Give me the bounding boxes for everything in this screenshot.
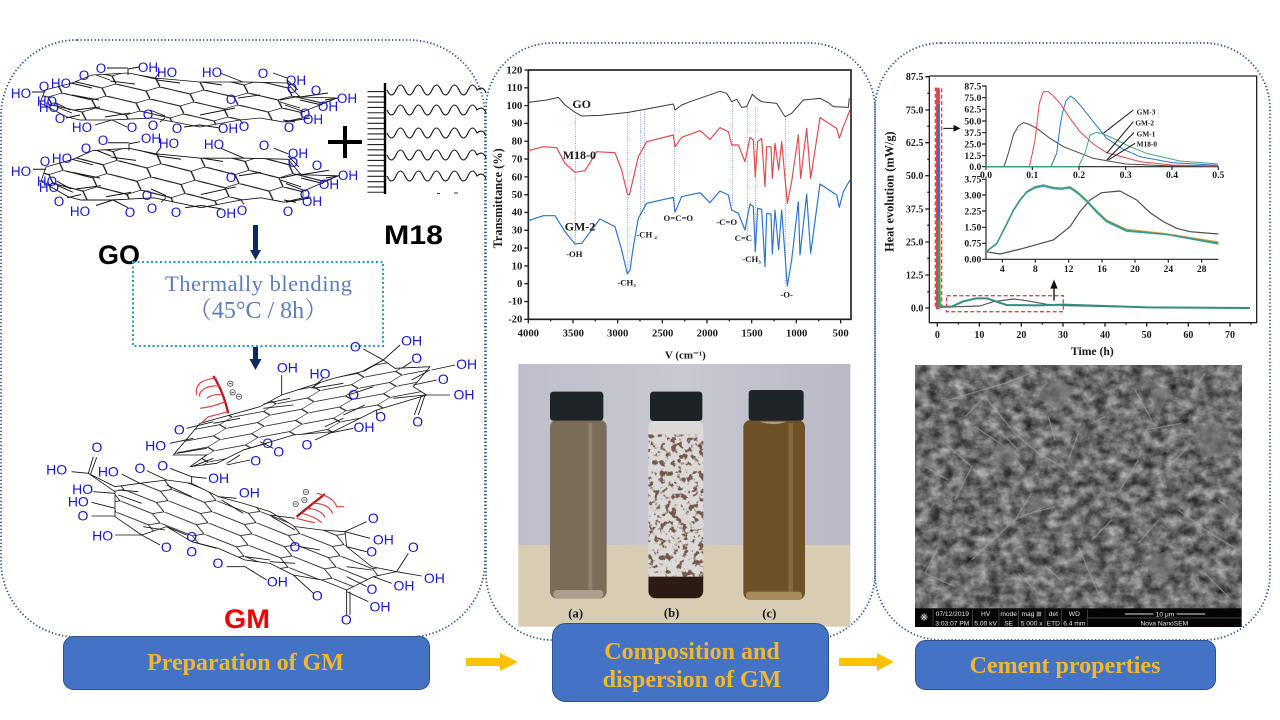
FTIR axis tick labels: 70 [512, 154, 522, 165]
GM molecule lower sheet: HO [92, 527, 113, 543]
GO curve [528, 91, 849, 117]
vial a [550, 392, 607, 598]
top inset tick labels: 0.5 [1212, 170, 1225, 181]
SEM info bar: 3:03:07 PM [935, 620, 969, 627]
photo background [518, 364, 850, 545]
GO molecule lower sheet: OH [319, 177, 339, 192]
FTIR axis tick labels: 10 [512, 261, 522, 272]
GO molecule lower sheet: O [98, 133, 108, 148]
FTIR peak labels: -O- [780, 289, 793, 299]
FTIR axis tick labels: 2500 [652, 329, 673, 340]
GO molecule lower sheet: OH [338, 168, 358, 183]
y axis title: Heat evolution (mW/g) [882, 131, 896, 252]
GM molecule lower sheet: O [186, 528, 197, 544]
FTIR curve names: M18-0 [563, 148, 596, 162]
GO molecule lower sheet: O [312, 158, 322, 173]
GM molecule upper sheet: OH [454, 387, 474, 403]
top inset tick labels [964, 81, 1225, 181]
GO molecule lower sheet: HO [39, 180, 59, 195]
top inset labels and leader arrows: GM-1 [1137, 130, 1156, 139]
FTIR axis tick labels: 110 [507, 83, 522, 94]
FTIR y axis title: Transmittance (%) [491, 148, 505, 248]
vial labels [568, 606, 776, 621]
top inset labels and leader arrows [1103, 108, 1157, 160]
lower inset tick labels: 3.75 [964, 175, 981, 186]
red polymer chains with charges, upper [196, 376, 242, 423]
vial labels: (a) [568, 607, 583, 621]
FTIR axis tick labels: 20 [512, 243, 522, 254]
GM molecule lower sheet: OH [208, 470, 229, 486]
process box: thermally blending: Thermally blending [165, 271, 352, 296]
FTIR curve names: GM-2 [565, 220, 595, 234]
FTIR peak labels: O=C=O [664, 213, 693, 223]
top inset tick labels: 75.0 [964, 93, 981, 104]
GM label: GM [224, 604, 270, 634]
SEM info bar: 5.00 kV [974, 620, 998, 627]
FTIR curve names: GO [572, 97, 591, 111]
GM molecule lower sheet: O [366, 543, 377, 559]
label button: preparation of GM: Preparation of GM [147, 650, 344, 676]
SEM info bar: mag ⊞ [1021, 611, 1042, 618]
lower inset tick labels: 16 [1097, 264, 1107, 275]
top inset tick labels: 0.0 [969, 162, 981, 173]
SEM info bar: 07/12/2019 [936, 611, 969, 618]
FTIR axis tick labels: 3500 [563, 329, 584, 340]
GO molecule lower sheet: HO [11, 164, 31, 179]
GO molecule lower sheet: O [237, 203, 247, 218]
GO molecule lower sheet: O [300, 187, 310, 202]
vial labels: (b) [664, 606, 679, 620]
GO molecule upper sheet: O [226, 92, 236, 107]
GM molecule lower sheet: HO [46, 462, 67, 478]
GM molecule lower sheet [46, 439, 445, 628]
lower inset tick labels: 0.00 [964, 255, 981, 266]
main axis labels: 20 [1016, 330, 1026, 341]
GM molecule lower sheet: O [186, 543, 197, 559]
process box: thermally blending: （45°C / 8h） [188, 298, 328, 324]
GO molecule lower sheet [11, 131, 358, 221]
M18-0 curve [528, 110, 850, 203]
SEM info bar [915, 608, 1242, 627]
GO molecule lower sheet: HO [52, 151, 72, 166]
FTIR peak labels: -CH₃ [742, 254, 761, 264]
vial c [743, 390, 805, 600]
GO molecule upper sheet: O [311, 83, 321, 98]
main axis labels: 60 [1183, 330, 1193, 341]
GO molecule upper sheet: O [172, 121, 182, 136]
main axis labels: 37.5 [906, 204, 923, 215]
GO molecule lower sheet: HO [159, 136, 179, 151]
main axis labels: 25.0 [906, 237, 923, 248]
FTIR axis tick labels: 4000 [518, 329, 539, 340]
GM molecule lower sheet: HO [68, 493, 89, 509]
main curves [937, 89, 1250, 308]
FTIR x axis title: V (cm⁻¹) [665, 350, 706, 362]
GM molecule lower sheet: HO [98, 463, 119, 479]
arrow: composition to cement [839, 653, 894, 671]
FTIR axis tick labels: 2000 [697, 329, 718, 340]
GM molecule lower sheet: OH [370, 598, 390, 614]
GO molecule lower sheet: O [54, 194, 64, 209]
GO molecule upper sheet: HO [11, 86, 31, 101]
GO molecule upper sheet: OH [318, 99, 338, 114]
GO molecule upper sheet: HO [39, 100, 59, 115]
GO molecule upper sheet: O [127, 120, 137, 135]
lower inset tick labels: 24 [1164, 264, 1173, 275]
GM molecule lower sheet: OH [394, 578, 414, 594]
lower inset chart [964, 175, 1218, 275]
GM molecule lower sheet: OH [424, 570, 445, 586]
top inset curves [986, 92, 1218, 167]
FTIR axis tick labels: 500 [833, 329, 849, 340]
FTIR curve names [563, 97, 596, 234]
GM molecule upper sheet: O [350, 338, 361, 354]
top inset tick labels: 0.2 [1073, 170, 1085, 181]
vial b [648, 392, 703, 598]
lower inset tick labels: 28 [1197, 264, 1207, 275]
GO molecule lower sheet: O [171, 205, 181, 220]
GM molecule upper sheet: O [302, 436, 313, 452]
main plot frame and ticks [925, 76, 1257, 327]
FTIR axis tick labels: 40 [512, 208, 522, 219]
SEM info bar: Nova NanoSEM [1140, 620, 1188, 627]
GM molecule lower sheet: O [341, 612, 352, 628]
GM molecule lower sheet: O [157, 457, 168, 473]
GO molecule upper sheet: OH [303, 112, 323, 127]
GM molecule upper sheet: O [412, 413, 423, 429]
FTIR axis tick labels: 3000 [607, 329, 628, 340]
label button: composition and dispersion: Composition and [604, 639, 780, 665]
GO molecule upper sheet: O [148, 118, 158, 133]
main axis labels [906, 72, 1235, 341]
top inset tick labels: 25.0 [964, 139, 981, 150]
x axis title: Time (h) [1071, 345, 1114, 358]
top inset labels and leader arrows: GM-2 [1135, 119, 1154, 128]
plus sign [328, 126, 362, 158]
GO molecule upper sheet: OH [138, 60, 158, 75]
GM molecule upper sheet: O [438, 371, 449, 387]
GO molecule lower sheet: OH [141, 131, 161, 146]
SEM info bar: 5 000 x [1021, 620, 1043, 627]
GM molecule upper sheet: HO [310, 366, 331, 382]
top inset tick labels: 62.5 [964, 105, 981, 116]
GM molecule upper sheet: O [348, 387, 359, 403]
lower inset tick labels: 20 [1130, 264, 1140, 275]
GO molecule upper sheet: O [258, 66, 268, 81]
label button: composition and dispersion [552, 624, 828, 702]
main axis labels: 0.0 [911, 303, 923, 314]
top inset tick labels: 0.3 [1120, 170, 1132, 181]
SEM info bar: mode [1000, 611, 1017, 618]
GO molecule lower sheet: O [125, 205, 135, 220]
SEM info bar: ETD [1047, 620, 1060, 627]
top inset tick labels: 0.0 [980, 170, 992, 181]
GM molecule upper sheet: O [375, 408, 386, 424]
top inset tick labels: 0.1 [1026, 170, 1039, 181]
GO molecule upper sheet: O [143, 107, 153, 122]
panel: preparation of GM [1, 40, 486, 637]
photo: three vials [518, 364, 850, 627]
main axis labels: 87.5 [906, 72, 923, 83]
lower inset tick labels: 12 [1064, 264, 1074, 275]
GO molecule upper sheet: HO [157, 65, 177, 80]
GM molecule upper sheet: OH [354, 419, 374, 435]
FTIR axis tick labels: 60 [512, 172, 522, 183]
main axis labels: 70 [1225, 330, 1235, 341]
top inset tick labels: 12.5 [964, 151, 981, 162]
GO molecule lower sheet: O [142, 188, 152, 203]
GO molecule lower sheet: O [40, 154, 50, 169]
SEM micrograph [915, 365, 1242, 627]
FTIR axis tick labels: -20 [508, 315, 522, 326]
FTIR peak labels [566, 213, 793, 299]
lower inset curves [986, 185, 1218, 254]
FTIR peak guide lines [576, 102, 786, 283]
GM molecule upper sheet: O [411, 350, 422, 366]
FTIR axis tick labels: 30 [512, 226, 522, 237]
GO molecule upper sheet: HO [72, 120, 92, 135]
GO molecule upper sheet: OH [337, 91, 357, 106]
GM molecule lower sheet: O [368, 510, 379, 526]
GM molecule lower sheet: O [367, 581, 378, 597]
SEM flakes texture [915, 365, 1242, 608]
GM molecule upper sheet: HO [145, 437, 166, 453]
GO molecule upper sheet: O [287, 81, 297, 96]
GO molecule lower sheet: O [147, 201, 157, 216]
M18 label: M18 [384, 220, 443, 250]
FTIR transmittance chart [491, 65, 851, 362]
GM molecule upper sheet: O [250, 453, 261, 469]
GO molecule lower sheet: O [226, 170, 236, 185]
GO molecule upper sheet: O [55, 111, 65, 126]
arrow: preparation to composition [466, 653, 518, 671]
GO molecule lower sheet: OH [288, 146, 308, 161]
GO molecule upper sheet: O [79, 68, 89, 83]
GO molecule lower sheet: O [283, 204, 293, 219]
lower inset tick labels: 3.00 [964, 190, 981, 201]
GM molecule lower sheet: HO [72, 481, 93, 497]
main axis labels: 62.5 [906, 138, 923, 149]
arrow to lower inset [1051, 281, 1057, 301]
panel outline [486, 43, 875, 640]
GM molecule lower sheet: O [135, 460, 146, 476]
red polymer chains with charges, lower [293, 489, 344, 523]
arrow: blending to GM [250, 347, 262, 370]
panel outline [875, 43, 1270, 640]
FTIR axis tick labels: 120 [506, 65, 522, 76]
GO molecule upper sheet: OH [218, 121, 238, 136]
GM molecule lower sheet: OH [267, 573, 288, 589]
GO molecule lower sheet: OH [302, 194, 322, 209]
GO molecule upper sheet: HO [202, 65, 222, 80]
GO molecule lower sheet: O [259, 138, 269, 153]
lower inset tick labels: 4 [1000, 264, 1005, 275]
SEM info bar: det [1049, 611, 1058, 618]
lower inset tick labels: 0.75 [964, 239, 981, 250]
FTIR axis tick labels: 1500 [741, 329, 763, 340]
FTIR axis tick labels: 0 [517, 279, 522, 290]
main axis labels: 10 [974, 330, 984, 341]
GO molecule upper sheet: O [39, 79, 49, 94]
label button: composition and dispersion: dispersion of GM [603, 667, 781, 693]
main axis labels: 30 [1058, 330, 1068, 341]
GM molecule lower sheet: O [290, 538, 301, 554]
GO molecule upper sheet: HO [51, 76, 71, 91]
FTIR plot frame and ticks [524, 70, 851, 323]
GO molecule upper sheet: O [239, 119, 249, 134]
main axis labels: 40 [1100, 330, 1110, 341]
SEM info bar: WD [1069, 611, 1080, 618]
lower inset tick labels: 1.50 [964, 223, 981, 234]
GM molecule upper sheet: OH [401, 333, 422, 349]
FTIR peak labels: -CH ₂ [636, 229, 657, 239]
FTIR axis tick labels: 80 [512, 137, 522, 148]
GO molecule lower sheet: HO [37, 174, 57, 189]
FTIR axis tick labels: 90 [512, 119, 522, 130]
GM molecule upper sheet: O [174, 422, 185, 438]
main axis labels: 50 [1142, 330, 1152, 341]
top inset labels and leader arrows: GM-3 [1137, 108, 1156, 117]
top inset labels and leader arrows: M18-0 [1137, 140, 1157, 149]
FTIR axis tick labels: 1000 [786, 329, 807, 340]
FTIR axis tick labels: 50 [512, 190, 522, 201]
main axis labels: 12.5 [906, 270, 923, 281]
top inset tick labels: 0.4 [1166, 170, 1178, 181]
SEM info bar: HV [981, 611, 991, 618]
GM molecule upper sheet: O [273, 443, 284, 459]
SEM info bar: ❋ [920, 614, 928, 624]
top inset tick labels: 37.5 [964, 128, 981, 139]
GO molecule upper sheet [11, 60, 357, 136]
GO molecule upper sheet: O [284, 120, 294, 135]
GO molecule upper sheet: O [300, 106, 310, 121]
FTIR axis tick labels: 100 [506, 101, 522, 112]
GO molecule lower sheet: HO [204, 137, 224, 152]
dashed zoom boxes [935, 88, 1063, 312]
label button: cement properties: Cement properties [970, 653, 1160, 679]
SEM info bar: SE [1004, 620, 1014, 627]
FTIR peak labels: C=C [735, 233, 752, 243]
lower inset tick labels: 8 [1033, 264, 1038, 275]
GM-2 curve [528, 180, 850, 286]
GO molecule upper sheet: O [96, 61, 106, 76]
label button: cement properties [916, 640, 1216, 690]
GM molecule upper sheet: OH [456, 356, 477, 372]
GM molecule lower sheet: O [161, 539, 172, 555]
GM molecule upper sheet: OH [277, 359, 298, 375]
label button: preparation of GM [64, 636, 430, 690]
main axis labels: 75.0 [906, 105, 923, 116]
top inset tick labels: 87.5 [964, 81, 981, 92]
FTIR peak labels: -C=O [716, 217, 737, 227]
lower inset tick labels: 2.25 [964, 206, 981, 217]
panel outline [1, 40, 485, 637]
main axis labels: 50.0 [906, 171, 923, 182]
top inset tick labels: 50.0 [964, 116, 981, 127]
lower inset tick labels [964, 175, 1207, 275]
GO molecule lower sheet: OH [216, 206, 236, 221]
GM molecule lower sheet: OH [373, 532, 394, 548]
GM molecule upper sheet [145, 333, 477, 469]
FTIR axis tick labels: -10 [508, 297, 522, 308]
FTIR axis tick labels [506, 65, 849, 340]
GM molecule upper sheet: O [262, 435, 273, 451]
GM molecule lower sheet: O [213, 555, 224, 571]
lower inset axes [982, 178, 1218, 263]
process box: thermally blending [133, 262, 383, 346]
vial labels: (c) [762, 607, 776, 621]
GO molecule upper sheet: OH [286, 73, 306, 88]
GO molecule upper sheet: HO [37, 94, 57, 109]
GO molecule lower sheet: O [288, 155, 298, 170]
top inset axes [982, 85, 1218, 170]
top inset chart [964, 81, 1225, 181]
GM molecule lower sheet: O [408, 539, 419, 555]
SEM info bar: 10 μm [1156, 611, 1175, 618]
SEM info bar: 6.4 mm [1063, 620, 1086, 627]
M18 comb molecule [376, 83, 486, 194]
FTIR peak labels: -OH [566, 249, 583, 259]
FTIR peak labels: -CH₃ [617, 278, 636, 288]
GO label: GO [98, 240, 140, 270]
heat evolution chart [882, 72, 1257, 358]
main axis labels: 0 [935, 330, 940, 341]
arrow: GO and M18 to blending [250, 225, 261, 260]
GM molecule lower sheet: O [312, 588, 323, 604]
GM molecule lower sheet: OH [239, 484, 260, 500]
GM molecule lower sheet: O [92, 439, 103, 455]
GM molecule lower sheet: O [78, 508, 89, 524]
GO molecule lower sheet: O [81, 141, 91, 156]
GO molecule lower sheet: HO [70, 204, 90, 219]
arrow to top inset [943, 126, 959, 131]
panel: composition and dispersion [486, 43, 875, 640]
panel: cement properties [875, 43, 1270, 640]
